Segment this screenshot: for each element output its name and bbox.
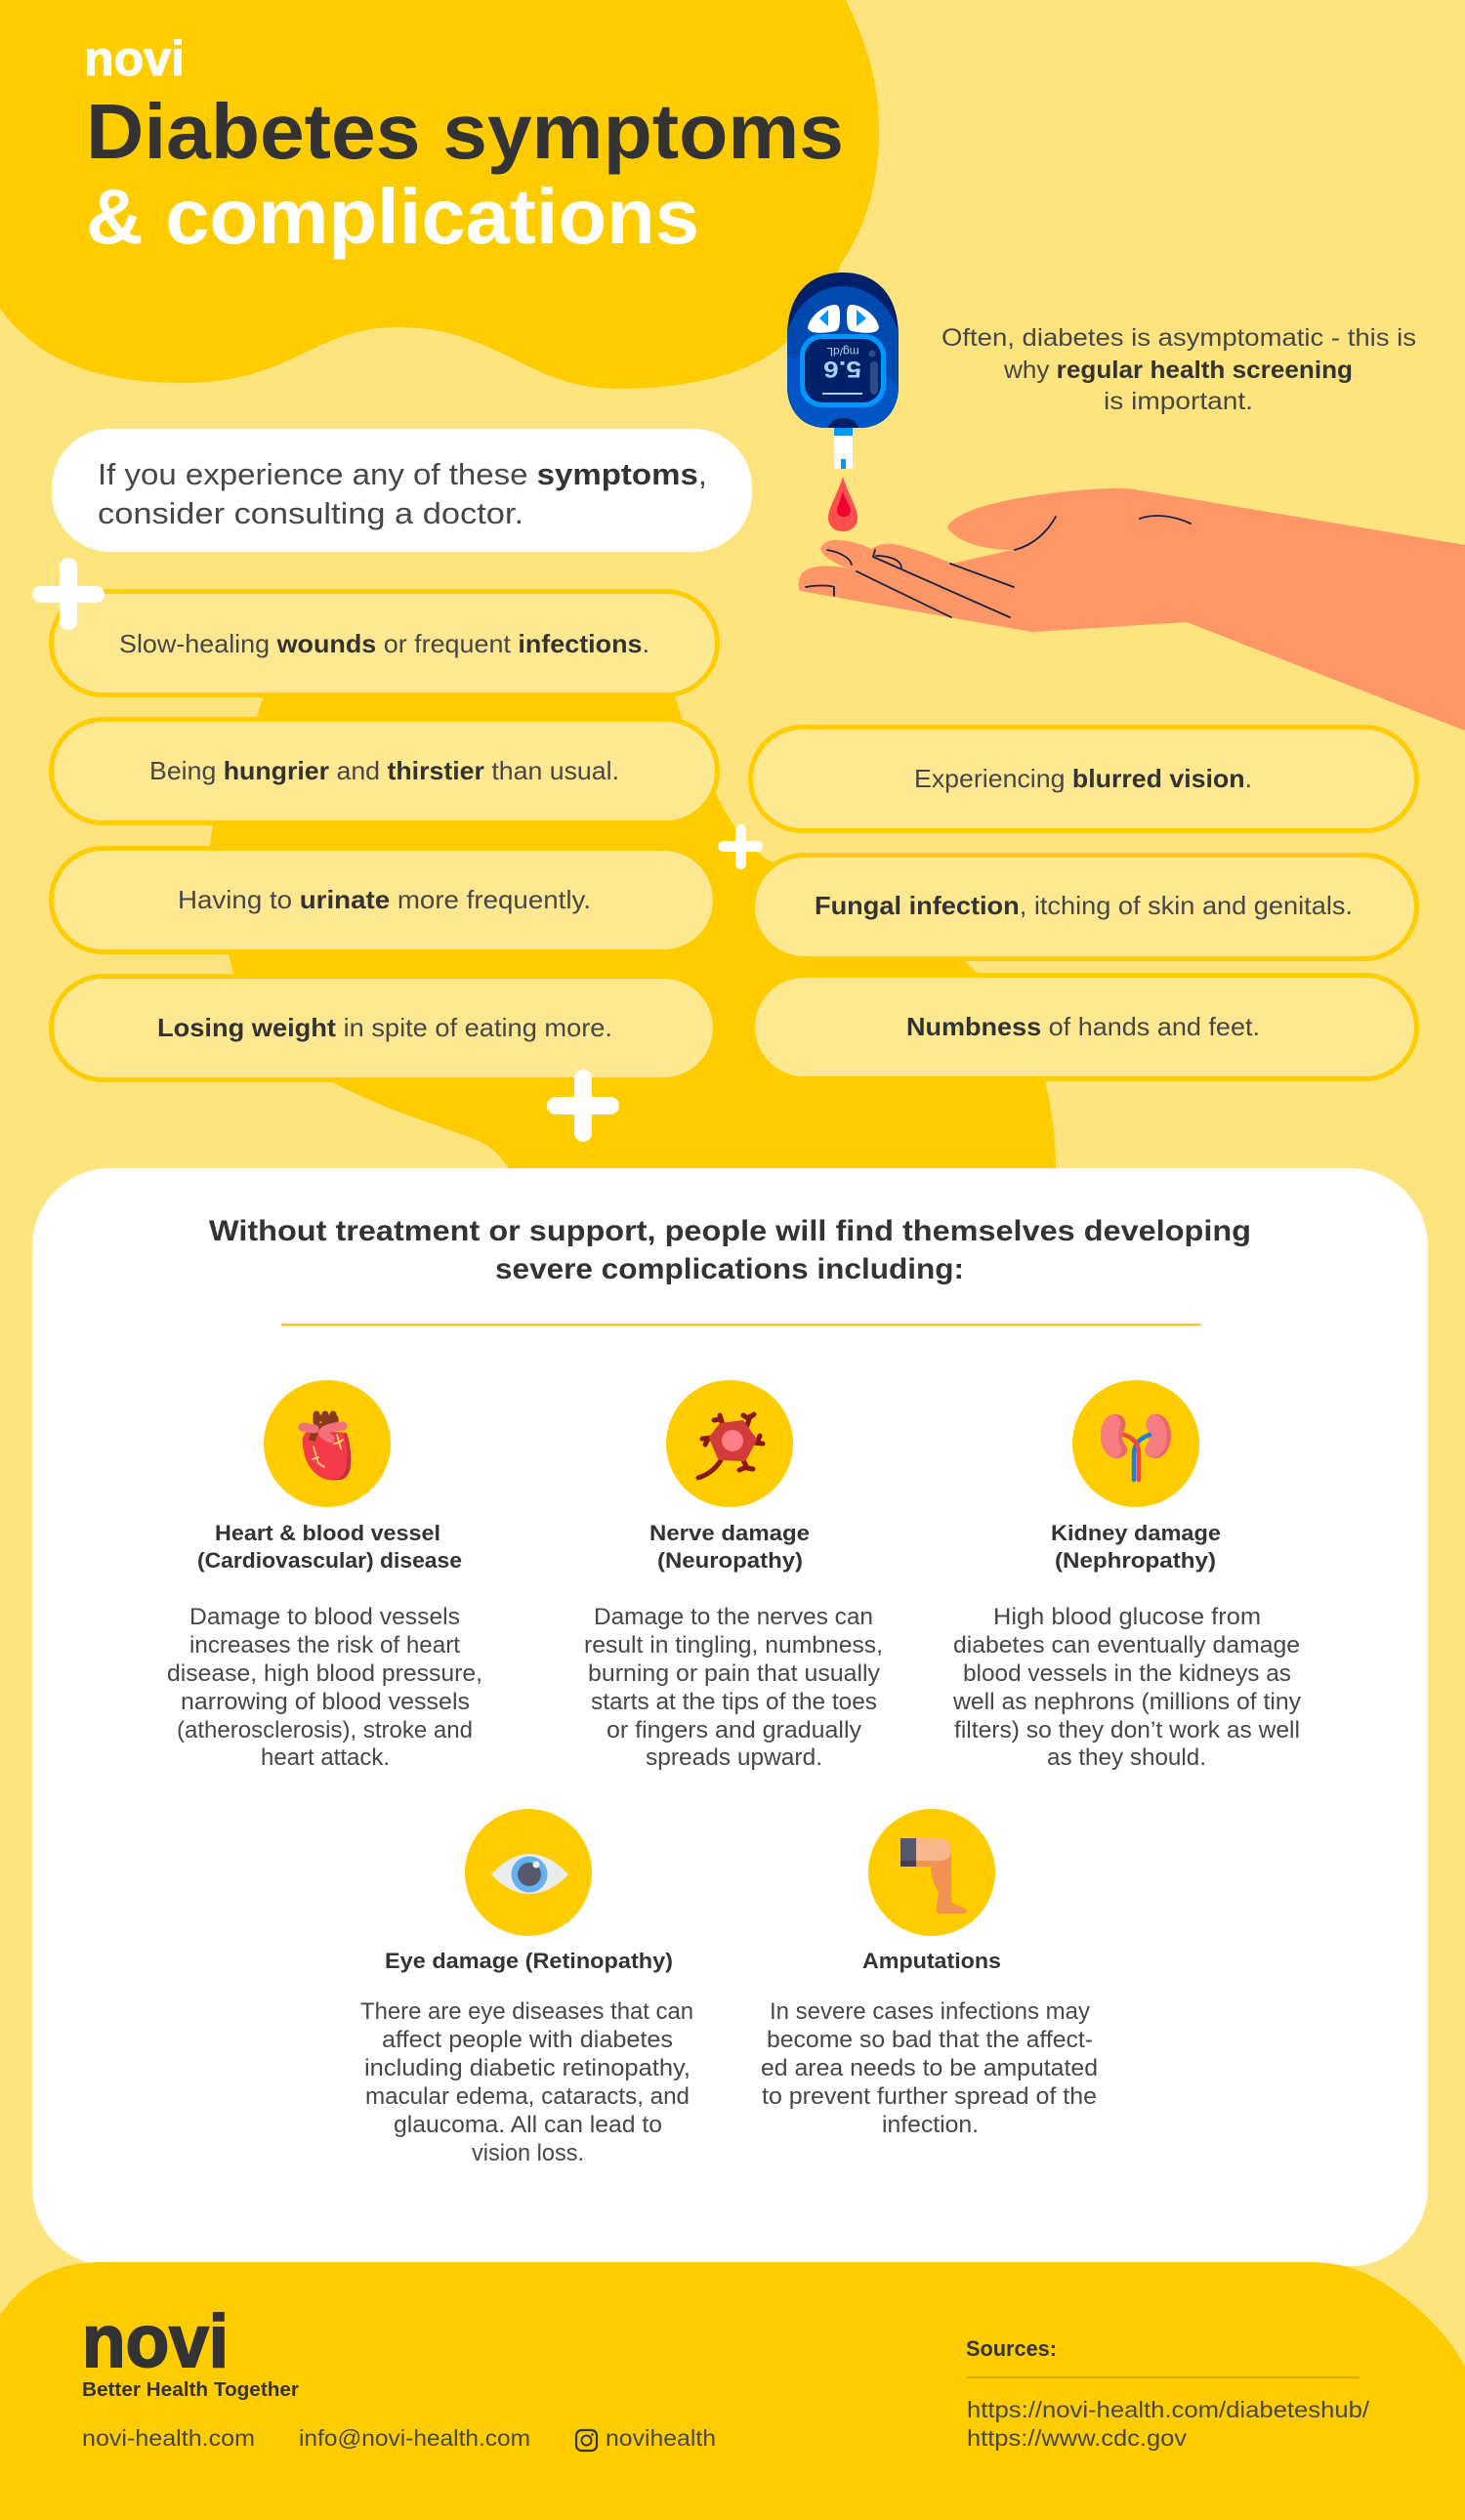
icon: heart xyxy=(264,1380,391,1507)
icon: eye xyxy=(465,1809,592,1936)
eye text: including diabetic retinopathy, xyxy=(364,2055,691,2081)
amputation text: infection. xyxy=(882,2112,979,2138)
amputation text: In severe cases infections may xyxy=(770,1998,1090,2025)
nerve text: burning or pain that usually xyxy=(588,1660,880,1687)
icon: hand xyxy=(799,488,1465,731)
amputation heading: Amputations xyxy=(862,1949,1001,1973)
eye text: glaucoma. All can lead to xyxy=(394,2112,662,2138)
kidney text xyxy=(952,1604,1301,1771)
heart text: narrowing of blood vessels xyxy=(181,1689,470,1715)
card: amputations xyxy=(761,1809,1098,2138)
eye text: macular edema, cataracts, and xyxy=(365,2083,690,2110)
heart text xyxy=(167,1604,482,1771)
heart text: heart attack. xyxy=(261,1744,390,1771)
heart text: Damage to blood vessels xyxy=(189,1604,460,1630)
amputation text: to prevent further spread of the xyxy=(762,2083,1097,2110)
screening note xyxy=(942,324,1416,415)
title: Diabetes symptoms xyxy=(86,88,844,175)
kidney heading: (Nephropathy) xyxy=(1055,1548,1216,1573)
brand name: novi xyxy=(84,31,185,86)
icon: neuron xyxy=(666,1380,793,1507)
card: heart disease xyxy=(167,1380,482,1771)
heart heading: Heart & blood vessel xyxy=(215,1521,440,1545)
card: kidney damage xyxy=(952,1380,1301,1771)
icon: glucose meter xyxy=(787,273,899,469)
icon: kidneys xyxy=(1072,1380,1199,1507)
heart heading: (Cardiovascular) disease xyxy=(197,1548,462,1573)
email: info@novi-health.com xyxy=(299,2425,530,2451)
nerve heading: (Neuropathy) xyxy=(657,1548,803,1573)
footer logo xyxy=(82,2300,299,2401)
eye text: vision loss. xyxy=(472,2140,584,2166)
website: novi-health.com xyxy=(82,2425,255,2451)
card: nerve damage xyxy=(584,1380,883,1771)
amputation text: ed area needs to be amputated xyxy=(761,2055,1098,2081)
nerve text: spreads upward. xyxy=(646,1744,822,1771)
sources: https://novi-health.com/diabeteshub/ xyxy=(967,2397,1370,2422)
footer logo: Better Health Together xyxy=(82,2379,299,2401)
heart text: disease, high blood pressure, xyxy=(167,1660,482,1687)
icon: leg xyxy=(868,1809,995,1936)
symptom: hunger: Being hungrier and thirstier than usual. xyxy=(149,756,619,785)
kidney text: as they should. xyxy=(1047,1744,1206,1771)
complications heading: severe complications including: xyxy=(495,1253,964,1285)
meter screen xyxy=(800,334,886,407)
symptom: hunger xyxy=(51,719,717,822)
sources: Sources: xyxy=(966,2336,1057,2361)
symptom: weight loss: Losing weight in spite of eating more. xyxy=(157,1013,612,1042)
eye text: affect people with diabetes xyxy=(382,2027,673,2053)
nerve text: or fingers and gradually xyxy=(607,1717,861,1743)
nerve text xyxy=(584,1604,883,1771)
eye text: There are eye diseases that can xyxy=(360,1998,693,2025)
amputation text xyxy=(761,1998,1098,2138)
symptom: fungal infection: Fungal infection , itching of skin and genitals. xyxy=(815,891,1353,920)
symptom: weight loss xyxy=(51,977,715,1080)
nerve heading: Nerve damage xyxy=(649,1521,810,1545)
complications heading: Without treatment or support, people will find themselves developing xyxy=(209,1215,1251,1247)
plus: bottom xyxy=(547,1070,619,1142)
central yellow blob xyxy=(210,674,1056,1168)
nerve text: starts at the tips of the toes xyxy=(591,1689,877,1715)
kidney text: well as nephrons (millions of tiny xyxy=(952,1689,1301,1715)
sources xyxy=(966,2336,1370,2451)
card: eye damage xyxy=(360,1809,693,2166)
symptom: blurred vision: Experiencing blurred vision. xyxy=(914,764,1252,793)
complications panel xyxy=(32,1168,1428,2266)
intro pill: If you experience any of these symptoms , xyxy=(98,457,707,491)
amputation text: become so bad that the affect- xyxy=(767,2027,1093,2053)
symptom: urination: Having to urinate more frequently. xyxy=(178,885,591,914)
header blob xyxy=(0,0,879,389)
eye heading: Eye damage (Retinopathy) xyxy=(385,1949,673,1973)
nerve heading xyxy=(649,1521,810,1573)
footer blob xyxy=(0,2262,1465,2520)
kidney heading: Kidney damage xyxy=(1051,1521,1221,1545)
symptom: wounds: Slow-healing wounds or frequent infections. xyxy=(119,629,649,658)
kidney text: diabetes can eventually damage xyxy=(953,1632,1300,1659)
nerve text: Damage to the nerves can xyxy=(594,1604,873,1630)
kidney heading xyxy=(1051,1521,1221,1573)
symptom: urination xyxy=(51,848,715,951)
sources: https://www.cdc.gov xyxy=(967,2425,1188,2451)
kidney text: blood vessels in the kidneys as xyxy=(963,1660,1291,1687)
symptom: wounds xyxy=(51,592,717,695)
meter strip xyxy=(834,428,853,469)
kidney text: High blood glucose from xyxy=(993,1604,1261,1630)
plus: top left xyxy=(32,558,105,630)
plus: middle xyxy=(718,824,763,869)
symptom: numbness: Numbness of hands and feet. xyxy=(906,1012,1260,1041)
screening note: why regular health screening xyxy=(1003,357,1353,384)
meter screen: 5.6 xyxy=(823,356,861,382)
complications heading xyxy=(209,1215,1251,1285)
eye text xyxy=(360,1998,693,2166)
intro pill: consider consulting a doctor. xyxy=(98,496,523,530)
kidney text: filters) so they don’t work as well xyxy=(954,1717,1300,1743)
symptom: fungal infection xyxy=(752,856,1416,959)
intro pill xyxy=(52,429,752,552)
heart heading xyxy=(197,1521,462,1573)
symptom: numbness xyxy=(752,975,1416,1078)
screening note: is important. xyxy=(1104,388,1253,415)
icon: blood drop xyxy=(828,477,858,531)
title: & complications xyxy=(86,173,699,260)
meter buttons xyxy=(808,305,879,333)
instagram handle: novihealth xyxy=(606,2425,716,2451)
nerve text: result in tingling, numbness, xyxy=(584,1632,883,1659)
heart text: increases the risk of heart xyxy=(189,1632,460,1659)
heart text: (atherosclerosis), stroke and xyxy=(177,1717,473,1743)
screening note: Often, diabetes is asymptomatic - this is xyxy=(942,324,1416,352)
footer logo: novi xyxy=(82,2300,229,2383)
title xyxy=(86,88,844,260)
meter screen: mg/dL xyxy=(826,345,859,358)
symptom: blurred vision xyxy=(750,727,1416,830)
